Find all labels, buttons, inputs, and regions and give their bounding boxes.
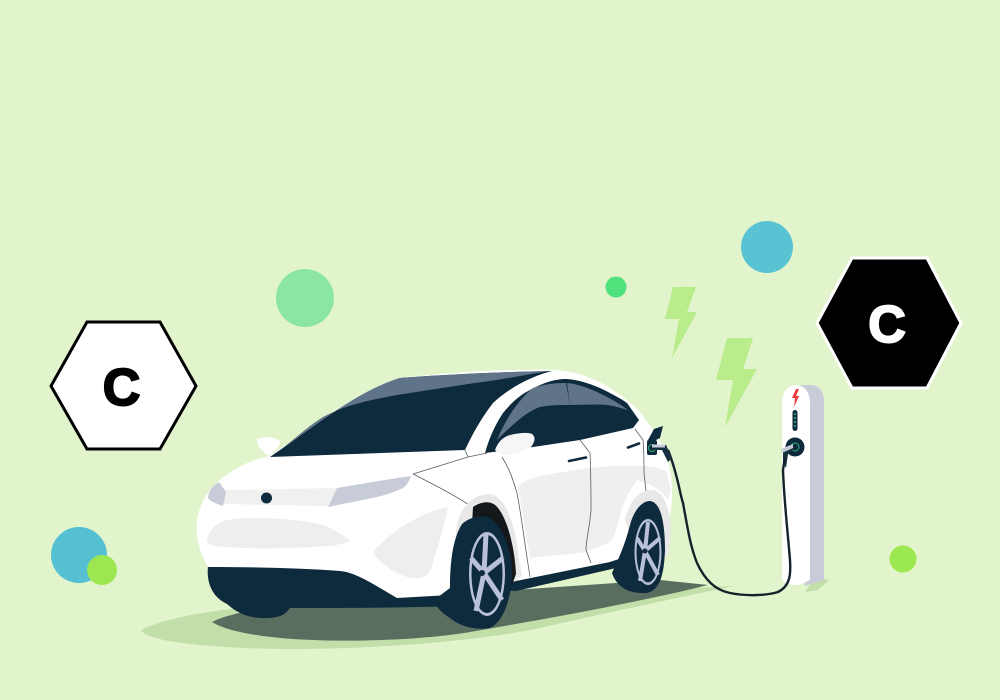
charging station <box>781 385 829 592</box>
icon: small lightning bolt <box>665 287 697 358</box>
grille panel <box>207 518 350 548</box>
windshield <box>270 371 552 457</box>
door handles <box>569 444 639 461</box>
station front <box>782 385 810 585</box>
side windows <box>485 379 639 453</box>
front bumper dark <box>208 560 455 618</box>
circles: blue and lime left <box>51 527 117 585</box>
side door panel <box>518 466 671 558</box>
station side <box>800 385 824 586</box>
hexagon badge: black C: C <box>868 296 906 354</box>
icon: red bolt <box>792 389 799 407</box>
station ground shadow <box>805 578 829 592</box>
circle: blue top <box>741 221 793 273</box>
headlight right <box>328 476 411 507</box>
charging port and plug <box>647 426 672 462</box>
body <box>196 370 672 598</box>
hexagon badge: white C <box>51 322 196 449</box>
hexagon badge: white C: C <box>103 359 140 417</box>
icon: large lightning bolt <box>716 338 757 427</box>
badge <box>261 492 272 504</box>
socket and plug <box>781 438 804 468</box>
headlight left <box>208 482 226 506</box>
front wheel <box>434 494 522 629</box>
side intake panel <box>374 507 448 578</box>
circle: lime right <box>890 546 916 572</box>
circle: large green <box>276 269 334 327</box>
side mirror left <box>257 437 280 456</box>
charging cable <box>668 450 790 595</box>
rear wheel <box>612 490 671 593</box>
door mirror <box>495 433 535 455</box>
body seam lines <box>413 429 647 577</box>
circle: small green <box>606 276 626 298</box>
headlight strip <box>224 488 337 506</box>
battery indicator <box>792 410 798 431</box>
sill dark <box>500 545 625 591</box>
ground shadow <box>141 580 735 649</box>
hexagon badge: black C <box>817 258 961 388</box>
car <box>196 370 672 629</box>
